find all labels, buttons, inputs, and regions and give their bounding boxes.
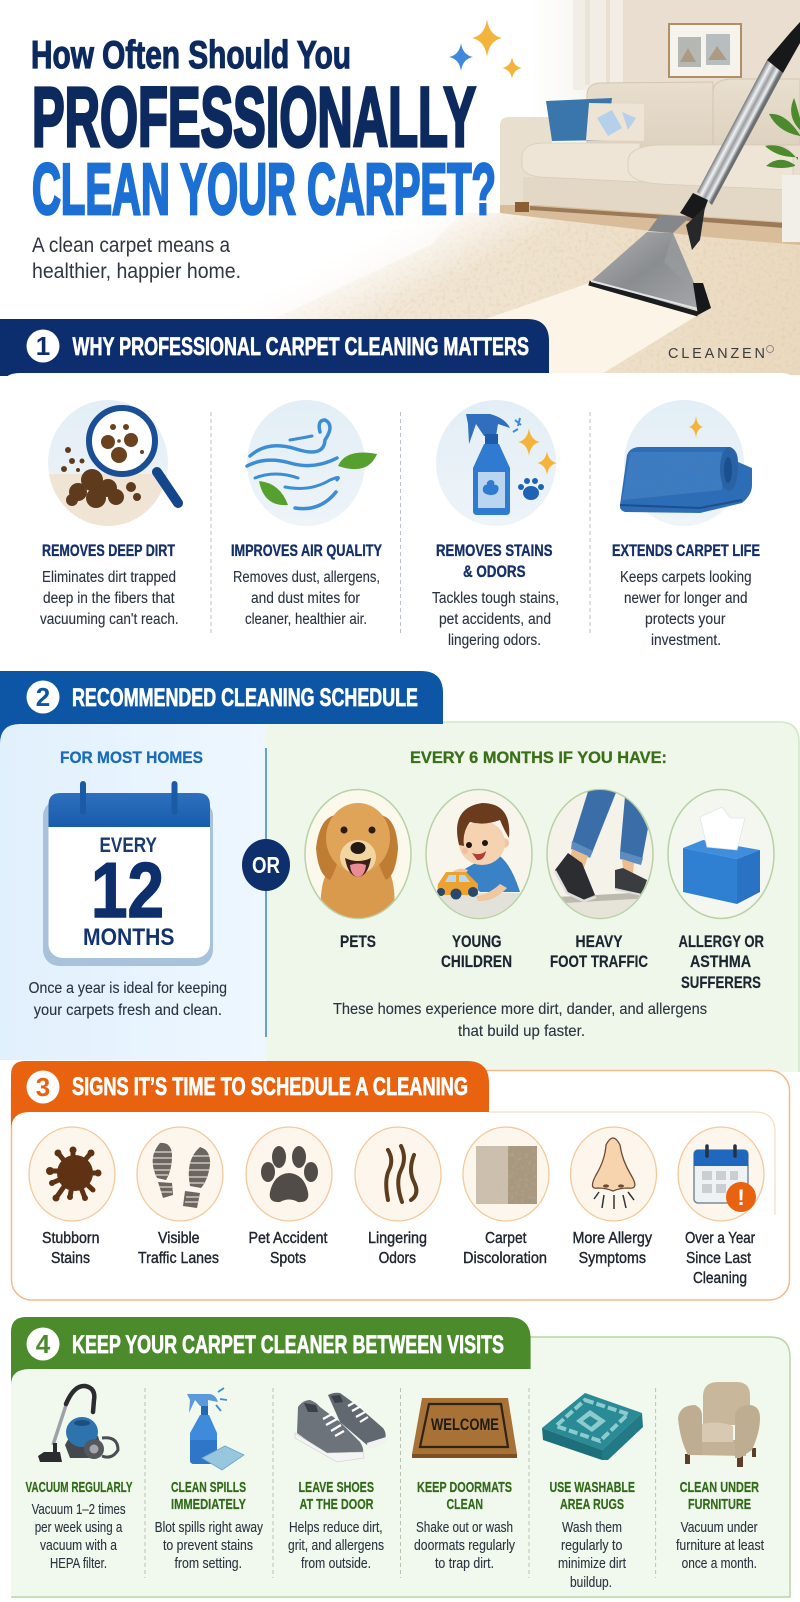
head xyxy=(504,838,509,848)
tip: clean under furniture xyxy=(676,1382,764,1572)
number badge: 1 xyxy=(36,331,50,361)
oval: pets dog xyxy=(305,790,411,925)
heading: CLEAN SPILLS xyxy=(171,1479,246,1496)
sparkles xyxy=(449,19,522,79)
description xyxy=(233,569,380,628)
description: buildup. xyxy=(570,1575,612,1591)
description: once a month. xyxy=(682,1556,757,1572)
heading: USE WASHABLE xyxy=(550,1479,635,1496)
calendar: MONTHS xyxy=(83,924,174,951)
description: deep in the fibers that xyxy=(43,590,175,607)
calendar xyxy=(43,784,213,966)
description: to trap dirt. xyxy=(435,1556,494,1572)
label: Cleaning xyxy=(693,1270,747,1287)
tissue xyxy=(700,807,745,850)
heading xyxy=(417,1479,512,1513)
tip: vacuum regularly xyxy=(26,1386,132,1572)
labels: SUFFERERS xyxy=(681,973,761,992)
oval: heavy foot traffic xyxy=(547,785,653,921)
benefit: removes deep dirt xyxy=(40,400,180,628)
icon: magnifier over dirt xyxy=(40,400,180,534)
labels: FOOT TRAFFIC xyxy=(550,952,648,971)
description: per week using a xyxy=(35,1520,123,1536)
icon: spray and cloth xyxy=(187,1388,244,1470)
icon: armchair xyxy=(678,1382,760,1467)
description xyxy=(558,1520,626,1591)
description xyxy=(333,1001,707,1040)
heading: IMMEDIATELY xyxy=(171,1496,246,1513)
description: grit, and allergens xyxy=(288,1538,384,1554)
description xyxy=(620,569,752,649)
label: Stubborn xyxy=(42,1230,100,1247)
icon: welcome mat: WELCOME xyxy=(431,1415,499,1434)
heading xyxy=(550,1479,635,1513)
labels xyxy=(340,932,764,992)
sign: visible traffic lanes xyxy=(137,1127,223,1267)
icon: calendar alert xyxy=(694,1146,756,1212)
sign: more allergy symptoms xyxy=(570,1127,656,1267)
sofa xyxy=(500,79,800,228)
tip: leave shoes at the door xyxy=(288,1393,386,1572)
title: PROFESSIONALLY xyxy=(32,70,476,164)
description: vacuuming can't reach. xyxy=(40,611,179,628)
sign: carpet discoloration xyxy=(463,1127,549,1267)
label xyxy=(572,1230,652,1267)
description: and dust mites for xyxy=(251,590,360,607)
label: Odors xyxy=(379,1250,416,1267)
description xyxy=(32,1502,126,1572)
left leg xyxy=(572,790,616,853)
icon: footprints xyxy=(151,1143,210,1208)
icon: nose xyxy=(592,1138,635,1209)
sign: lingering odors xyxy=(355,1127,441,1267)
description: Helps reduce dirt, xyxy=(289,1520,383,1536)
description: vacuum with a xyxy=(40,1538,118,1554)
icon: paw xyxy=(261,1146,318,1202)
framed picture xyxy=(668,23,742,78)
icon: sneakers xyxy=(295,1393,386,1462)
patterned pillow xyxy=(586,103,644,141)
heading: REMOVES DEEP DIRT xyxy=(42,541,175,560)
number badge xyxy=(26,1070,60,1104)
labels: CHILDREN xyxy=(441,952,512,971)
icon: rolled carpet xyxy=(620,400,752,526)
heading: CLEAN UNDER xyxy=(680,1479,759,1496)
labels: HEAVY xyxy=(576,932,623,951)
description: investment. xyxy=(651,632,721,649)
description: Tackles tough stains, xyxy=(432,590,559,607)
heading: LEAVE SHOES xyxy=(298,1479,374,1496)
wall and window xyxy=(564,0,800,175)
description: lingering odors. xyxy=(448,632,541,649)
label xyxy=(138,1230,219,1267)
heading xyxy=(680,1479,759,1513)
panel: signs xyxy=(12,1070,790,1300)
panel: why it matters xyxy=(0,373,800,660)
number badge xyxy=(26,330,60,362)
description: Vacuum 1–2 times xyxy=(32,1502,126,1518)
subtitle xyxy=(32,234,241,283)
label: Carpet xyxy=(485,1230,527,1247)
description: Wash them xyxy=(562,1520,622,1536)
icon: vacuum xyxy=(38,1386,118,1462)
sign: pet accident spots xyxy=(246,1127,332,1267)
section 4 banner xyxy=(11,1317,531,1385)
toy car xyxy=(437,872,478,895)
label: Symptoms xyxy=(579,1250,646,1267)
subtitle: A clean carpet means a xyxy=(32,234,230,257)
labels: ASTHMA xyxy=(690,952,751,971)
label xyxy=(248,1230,328,1267)
hero photo: carpet cleaning in a living room xyxy=(230,0,800,377)
clean strip on carpet xyxy=(486,283,698,373)
icon: folded rug xyxy=(542,1393,643,1460)
section 3 heading: SIGNS IT’S TIME TO SCHEDULE A CLEANING xyxy=(72,1073,468,1101)
labels: YOUNG xyxy=(452,932,502,951)
label: Since Last xyxy=(686,1250,751,1267)
tissue box xyxy=(683,840,760,859)
label: Traffic Lanes xyxy=(138,1250,219,1267)
description: protects your xyxy=(645,611,726,628)
description xyxy=(676,1520,764,1572)
leaf xyxy=(338,452,377,469)
icon: splat xyxy=(46,1146,102,1202)
oval: allergy or asthma xyxy=(668,790,774,918)
heading xyxy=(298,1479,374,1513)
labels: PETS xyxy=(340,932,376,951)
heading: AT THE DOOR xyxy=(300,1496,374,1513)
divider line and OR badge: OR xyxy=(252,852,280,878)
heading: KEEP DOORMATS xyxy=(417,1479,512,1496)
benefit: improves air quality xyxy=(231,400,382,628)
description: minimize dirt xyxy=(558,1556,626,1572)
icon: odor waves xyxy=(386,1146,416,1202)
description: from setting. xyxy=(174,1556,242,1572)
description: furniture at least xyxy=(676,1538,764,1554)
carpet xyxy=(274,213,800,375)
benefit: extends carpet life xyxy=(612,400,760,649)
heading: CLEAN xyxy=(446,1496,483,1513)
description: your carpets fresh and clean. xyxy=(34,1002,222,1019)
description: HEPA filter. xyxy=(50,1556,107,1572)
label: More Allergy xyxy=(572,1230,652,1247)
heading: VACUUM REGULARLY xyxy=(26,1479,132,1496)
label: Discoloration xyxy=(463,1250,547,1267)
divider line and OR badge xyxy=(242,748,290,1037)
description: that build up faster. xyxy=(458,1023,585,1040)
description: Once a year is ideal for keeping xyxy=(28,980,227,997)
tip: clean spills immediately xyxy=(155,1388,264,1572)
description: These homes experience more dirt, dander, and allergens xyxy=(333,1001,707,1018)
plant xyxy=(765,98,800,242)
heading: REMOVES STAINS xyxy=(436,541,552,560)
tip: washable area rugs xyxy=(542,1393,643,1591)
leaf xyxy=(259,481,288,505)
calendar: 12 xyxy=(91,846,164,934)
label xyxy=(685,1230,756,1287)
heading: & ODORS xyxy=(463,562,526,581)
section 1 banner xyxy=(0,319,549,376)
tip: keep doormats clean xyxy=(412,1398,517,1572)
panel: schedule, every 6 months xyxy=(266,722,800,1072)
label: Lingering xyxy=(368,1230,427,1247)
description xyxy=(28,980,227,1019)
section 2 banner xyxy=(0,671,443,744)
brand logo: CLEANZEN xyxy=(668,346,765,362)
description: regularly to xyxy=(561,1538,622,1554)
number badge xyxy=(26,1328,60,1360)
title: How Often Should You xyxy=(31,34,351,77)
panel: between visits xyxy=(11,1337,790,1597)
icon: spray bottle, sparkles, paw xyxy=(436,400,557,526)
icon: calendar alert: ! xyxy=(737,1185,745,1210)
icon: air flow and leaves xyxy=(247,400,377,526)
title xyxy=(31,34,496,230)
label: Visible xyxy=(158,1230,200,1247)
label: Spots xyxy=(270,1250,306,1267)
label xyxy=(463,1230,547,1267)
description: Removes dust, allergens, xyxy=(233,569,380,586)
description: cleaner, healthier air. xyxy=(245,611,367,628)
vacuum wand xyxy=(680,22,800,250)
label: Over a Year xyxy=(685,1230,756,1247)
description: from outside. xyxy=(301,1556,371,1572)
heading: FOR MOST HOMES xyxy=(60,748,203,767)
extractor nozzle xyxy=(589,215,711,315)
heading: IMPROVES AIR QUALITY xyxy=(231,541,382,560)
section 1 heading: WHY PROFESSIONAL CARPET CLEANING MATTERS xyxy=(72,333,529,361)
description xyxy=(414,1520,516,1572)
right leg xyxy=(620,798,648,858)
heading xyxy=(171,1479,246,1513)
label: Pet Accident xyxy=(248,1230,328,1247)
description xyxy=(432,590,559,649)
sofa cushions xyxy=(522,143,640,182)
icon: welcome mat xyxy=(412,1398,517,1458)
description: Shake out or wash xyxy=(416,1520,513,1536)
number badge: 4 xyxy=(36,1329,51,1359)
shirt xyxy=(464,856,520,892)
sign: stubborn stains xyxy=(29,1127,115,1267)
number badge: 2 xyxy=(36,682,50,712)
description: Keeps carpets looking xyxy=(620,569,752,586)
wood floor xyxy=(500,205,800,248)
description: doormats regularly xyxy=(414,1538,516,1554)
description: Eliminates dirt trapped xyxy=(42,569,176,586)
heading: FURNITURE xyxy=(688,1496,751,1513)
description: pet accidents, and xyxy=(439,611,551,628)
calendar: EVERY xyxy=(100,834,157,857)
sign: over a year since last cleaning xyxy=(678,1127,764,1287)
labels: ALLERGY OR xyxy=(678,932,764,951)
label xyxy=(42,1230,100,1267)
description xyxy=(288,1520,384,1572)
section 4 heading: KEEP YOUR CARPET CLEANER BETWEEN VISITS xyxy=(72,1331,504,1359)
description xyxy=(155,1520,264,1572)
number badge: 3 xyxy=(36,1072,50,1102)
description xyxy=(40,569,179,628)
benefit: removes stains and odors xyxy=(432,400,559,649)
heading: AREA RUGS xyxy=(560,1496,624,1513)
icon: carpet swatch xyxy=(476,1146,537,1204)
description: to prevent stains xyxy=(163,1538,253,1554)
section 2 heading: RECOMMENDED CLEANING SCHEDULE xyxy=(72,684,418,712)
number badge xyxy=(26,680,60,714)
panel: schedule, every 12 months xyxy=(0,723,266,1060)
description: Vacuum under xyxy=(681,1520,758,1536)
oval: young children xyxy=(426,790,532,923)
section 3 banner xyxy=(11,1061,489,1130)
heading: EVERY 6 MONTHS IF YOU HAVE: xyxy=(410,748,667,767)
description: Blot spills right away xyxy=(155,1520,264,1536)
description: newer for longer and xyxy=(624,590,748,607)
label xyxy=(368,1230,427,1267)
label: Stains xyxy=(51,1250,90,1267)
blue pillow xyxy=(546,98,612,141)
heading xyxy=(436,541,552,581)
subtitle: healthier, happier home. xyxy=(32,260,241,283)
